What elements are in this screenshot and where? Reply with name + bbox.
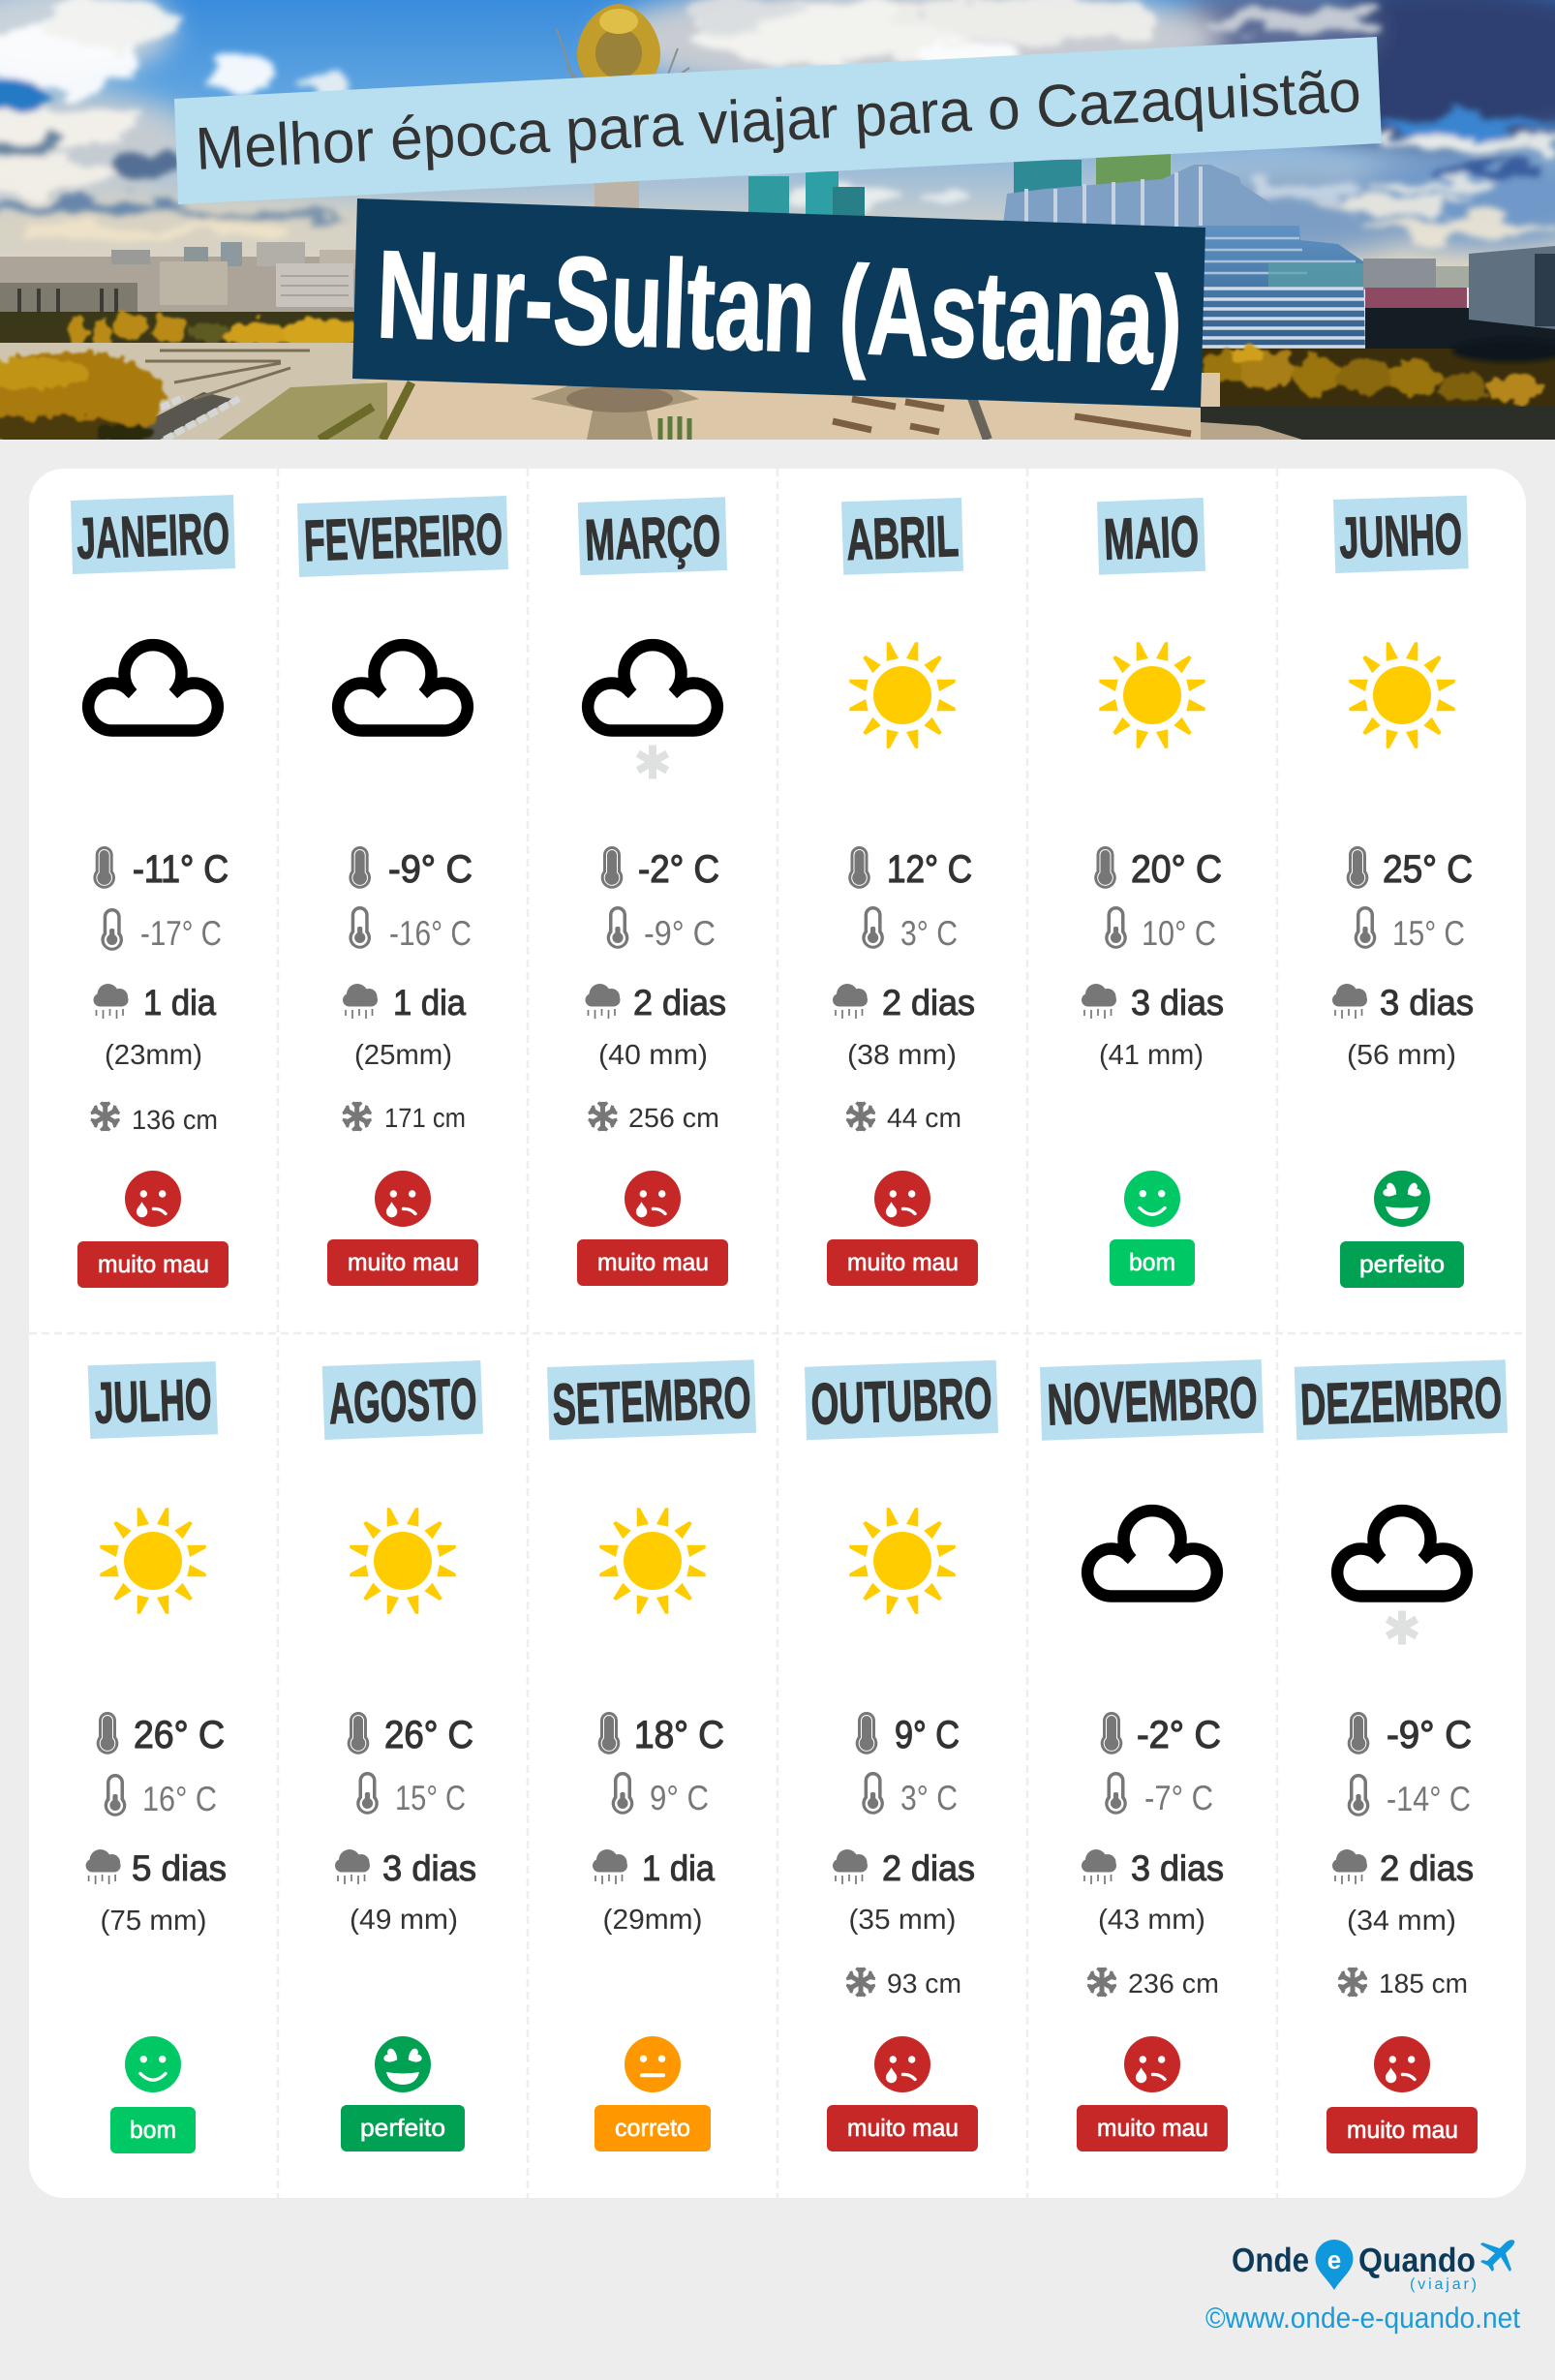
rainfall: (34 mm) xyxy=(1347,1906,1456,1937)
autumn trees xyxy=(0,312,1555,409)
logo: Onde e Quando: (viajar) xyxy=(1410,2276,1477,2293)
snow depth xyxy=(1087,1968,1219,1999)
rating badge xyxy=(577,1239,728,1286)
rating badge: muito mau xyxy=(1097,2115,1208,2142)
logo: Onde e Quando: Onde xyxy=(1232,2242,1309,2279)
rating face xyxy=(125,1171,181,1227)
max temperature: 26° C xyxy=(384,1714,473,1756)
rain days xyxy=(86,1848,227,1888)
snow depth xyxy=(342,1102,466,1133)
month label: maio: MAIO xyxy=(1103,503,1200,572)
max temperature xyxy=(348,1712,473,1756)
min temperature: -16° C xyxy=(389,913,472,953)
max temperature: -9° C xyxy=(1387,1714,1472,1756)
min temperature: -7° C xyxy=(1144,1778,1213,1817)
max temperature xyxy=(93,846,229,891)
min temperature: 9° C xyxy=(650,1778,709,1817)
icon: sun xyxy=(350,1508,456,1614)
min temperature: 15° C xyxy=(395,1778,466,1817)
rating face xyxy=(874,1171,930,1227)
month label: junho: JUNHO xyxy=(1338,502,1463,570)
snow depth xyxy=(90,1102,218,1135)
rating badge xyxy=(77,1241,229,1288)
month label: julho xyxy=(88,1361,218,1439)
max temperature: 20° C xyxy=(1131,848,1222,891)
month: maio xyxy=(1082,498,1224,1286)
month label: abril xyxy=(841,498,963,575)
website credit: ©www.onde-e-quando.net xyxy=(1205,2303,1521,2334)
month: agosto xyxy=(322,1360,483,2151)
rain days: 2 dias xyxy=(633,983,726,1022)
hero photo: Astana skyline xyxy=(0,0,1555,446)
month label: janeiro xyxy=(71,495,235,574)
rain days xyxy=(833,983,975,1022)
month: dezembro xyxy=(1295,1359,1508,2153)
min temperature xyxy=(1105,906,1216,953)
month label: agosto: AGOSTO xyxy=(327,1366,478,1436)
logo: Onde e Quando xyxy=(1232,2240,1514,2293)
rain days xyxy=(93,983,216,1022)
rating badge xyxy=(110,2107,196,2153)
rain days xyxy=(343,983,466,1022)
rain days xyxy=(1082,1848,1224,1888)
min temperature xyxy=(862,906,958,953)
rain days xyxy=(833,1848,975,1888)
max temperature: -11° C xyxy=(133,848,229,891)
snow depth: 136 cm xyxy=(132,1105,218,1135)
rain days: 1 dia xyxy=(143,983,216,1022)
rating face xyxy=(1124,2036,1180,2092)
rating face xyxy=(625,2036,681,2092)
min temperature xyxy=(607,906,716,953)
month label: outubro xyxy=(805,1360,998,1440)
icon: sun xyxy=(100,1508,206,1614)
rain days: 1 dia xyxy=(642,1848,715,1888)
rain days xyxy=(593,1848,715,1888)
max temperature xyxy=(1101,1712,1221,1756)
icon: cloud with snow xyxy=(1337,1510,1467,1644)
icon: sun xyxy=(1349,642,1455,748)
min temperature: -17° C xyxy=(140,913,222,953)
rain days: 5 dias xyxy=(132,1848,227,1888)
min temperature xyxy=(1348,1774,1471,1818)
rating badge xyxy=(1326,2107,1478,2153)
icon: sun xyxy=(849,1508,956,1614)
rain days: 3 dias xyxy=(382,1848,476,1888)
logo: Onde e Quando: Quando xyxy=(1358,2242,1476,2279)
rain days: 2 dias xyxy=(882,983,975,1022)
max temperature: 25° C xyxy=(1383,848,1473,891)
rating badge xyxy=(595,2105,711,2151)
max temperature: 18° C xyxy=(634,1714,724,1756)
rain days: 2 dias xyxy=(882,1848,975,1888)
snow depth xyxy=(846,1102,961,1133)
icon: sun xyxy=(1099,642,1205,748)
rating face xyxy=(1374,1171,1430,1227)
snow depth: 185 cm xyxy=(1379,1968,1468,1999)
title banner xyxy=(352,198,1205,408)
month label: março: MARÇO xyxy=(584,503,721,573)
rainfall: (29mm) xyxy=(602,1905,703,1936)
month label: janeiro: JANEIRO xyxy=(76,501,230,571)
subtitle banner: Melhor época para viajar para o Cazaquistão xyxy=(194,58,1362,183)
snow depth: 256 cm xyxy=(628,1103,719,1133)
min temperature xyxy=(356,1772,466,1817)
rating badge xyxy=(1077,2105,1228,2151)
month: março xyxy=(577,497,728,1286)
monument xyxy=(557,4,689,210)
glass towers xyxy=(748,154,1365,353)
rating badge: bom xyxy=(1129,1249,1175,1276)
min temperature: 3° C xyxy=(900,913,958,953)
snow depth: 93 cm xyxy=(887,1968,961,1999)
icon: cloud xyxy=(338,645,468,731)
rain days: 2 dias xyxy=(1380,1848,1474,1888)
rating badge xyxy=(827,1239,978,1286)
min temperature: 3° C xyxy=(900,1778,958,1817)
month: outubro xyxy=(805,1360,998,2151)
icon: cloud xyxy=(1087,1510,1217,1596)
title banner: Nur-Sultan (Astana) xyxy=(375,225,1184,391)
max temperature xyxy=(97,1712,225,1756)
month: janeiro xyxy=(71,495,235,1288)
rain days: 3 dias xyxy=(1380,983,1474,1022)
month label: novembro xyxy=(1040,1359,1264,1441)
max temperature xyxy=(1347,846,1473,891)
month: fevereiro xyxy=(297,496,508,1286)
max temperature xyxy=(601,846,719,891)
rating badge: muito mau xyxy=(348,1249,459,1276)
rating badge: perfeito xyxy=(1359,1251,1445,1278)
rain days xyxy=(1332,983,1474,1022)
max temperature xyxy=(349,846,473,891)
rain days xyxy=(335,1848,476,1888)
min temperature xyxy=(862,1772,958,1817)
max temperature xyxy=(598,1712,724,1756)
plaza xyxy=(0,343,1555,446)
month: junho xyxy=(1332,496,1474,1288)
rainfall: (49 mm) xyxy=(350,1905,458,1936)
snow depth xyxy=(846,1968,961,1999)
max temperature: 26° C xyxy=(134,1714,225,1756)
rainfall: (38 mm) xyxy=(847,1040,957,1071)
rainfall: (41 mm) xyxy=(1099,1040,1204,1071)
max temperature: -2° C xyxy=(1137,1714,1221,1756)
min temperature xyxy=(612,1772,709,1817)
snow depth xyxy=(1338,1968,1468,1999)
icon: cloud xyxy=(88,645,218,731)
month label: março xyxy=(578,497,727,575)
month label: fevereiro xyxy=(297,496,508,577)
rainfall: (56 mm) xyxy=(1347,1040,1456,1071)
month label: maio xyxy=(1097,498,1205,575)
max temperature: 9° C xyxy=(895,1714,960,1756)
rating badge: muito mau xyxy=(1347,2117,1458,2144)
max temperature: -9° C xyxy=(388,848,473,891)
max temperature xyxy=(856,1712,960,1756)
min temperature xyxy=(101,908,222,953)
icon: sun xyxy=(599,1508,706,1614)
min temperature: -14° C xyxy=(1387,1779,1471,1818)
month label: junho xyxy=(1333,496,1469,573)
rating badge: bom xyxy=(130,2117,176,2144)
min temperature xyxy=(1355,906,1465,953)
max temperature: -2° C xyxy=(638,848,719,891)
icon: airplane xyxy=(1480,2240,1514,2272)
snow depth: 236 cm xyxy=(1128,1968,1219,1999)
rainfall: (75 mm) xyxy=(101,1906,207,1937)
rating face xyxy=(874,2036,930,2092)
max temperature xyxy=(1348,1712,1472,1756)
rain days xyxy=(585,983,726,1022)
rating badge: muito mau xyxy=(98,1251,209,1278)
month label: setembro xyxy=(547,1359,756,1440)
buildings left xyxy=(0,242,358,318)
rainfall: (25mm) xyxy=(354,1040,452,1071)
min temperature: 16° C xyxy=(142,1779,217,1818)
rating face xyxy=(375,2036,431,2092)
rainfall: (23mm) xyxy=(105,1040,202,1071)
rainfall: (40 mm) xyxy=(598,1040,708,1071)
month: setembro xyxy=(547,1359,756,2151)
rating badge: muito mau xyxy=(847,2115,959,2142)
month label: agosto xyxy=(322,1360,483,1440)
max temperature xyxy=(848,846,972,891)
rainfall: (35 mm) xyxy=(848,1905,957,1936)
rain days: 1 dia xyxy=(393,983,466,1022)
min temperature xyxy=(1105,1772,1213,1817)
icon: cloud with snow xyxy=(588,645,717,778)
rating face xyxy=(375,1171,431,1227)
month: novembro xyxy=(1040,1359,1264,2151)
max temperature xyxy=(1094,846,1222,891)
min temperature xyxy=(105,1774,217,1818)
rating badge: muito mau xyxy=(597,1249,709,1276)
rain days xyxy=(1082,983,1224,1022)
logo: Onde e Quando: e xyxy=(1327,2245,1341,2274)
rating badge xyxy=(327,1239,478,1286)
rating face xyxy=(1374,2036,1430,2092)
rating badge: muito mau xyxy=(847,1249,959,1276)
month: julho xyxy=(86,1361,227,2153)
rating badge xyxy=(827,2105,978,2151)
snow depth xyxy=(588,1102,719,1133)
rainfall: (43 mm) xyxy=(1098,1905,1205,1936)
rating badge xyxy=(341,2105,465,2151)
rain days: 3 dias xyxy=(1131,1848,1224,1888)
icon: sun xyxy=(849,642,956,748)
rain days: 3 dias xyxy=(1131,983,1224,1022)
rating face xyxy=(625,1171,681,1227)
main panel xyxy=(29,469,1526,2198)
month label: fevereiro: FEVEREIRO xyxy=(303,502,503,573)
snow depth: 44 cm xyxy=(887,1103,961,1133)
min temperature xyxy=(349,906,472,953)
min temperature: 10° C xyxy=(1142,913,1216,953)
month label: novembro: NOVEMBRO xyxy=(1046,1365,1259,1437)
rain days xyxy=(1332,1848,1474,1888)
rating badge: correto xyxy=(615,2115,690,2142)
rating badge xyxy=(1340,1241,1464,1288)
min temperature: 15° C xyxy=(1392,913,1465,953)
rating badge xyxy=(1110,1239,1195,1286)
rating badge: perfeito xyxy=(360,2115,445,2142)
max temperature: 12° C xyxy=(887,848,972,891)
rating face xyxy=(125,2036,181,2092)
buildings right xyxy=(1363,246,1555,356)
month label: abril: ABRIL xyxy=(845,503,960,572)
min temperature: -9° C xyxy=(644,913,716,953)
snow depth: 171 cm xyxy=(384,1103,466,1133)
icon: location pin xyxy=(1315,2240,1354,2290)
month: abril xyxy=(827,498,978,1286)
month label: setembro: SETEMBRO xyxy=(551,1365,752,1437)
rating face xyxy=(1124,1171,1180,1227)
month label: julho: JULHO xyxy=(93,1366,213,1436)
month label: outubro: OUTUBRO xyxy=(809,1365,993,1437)
